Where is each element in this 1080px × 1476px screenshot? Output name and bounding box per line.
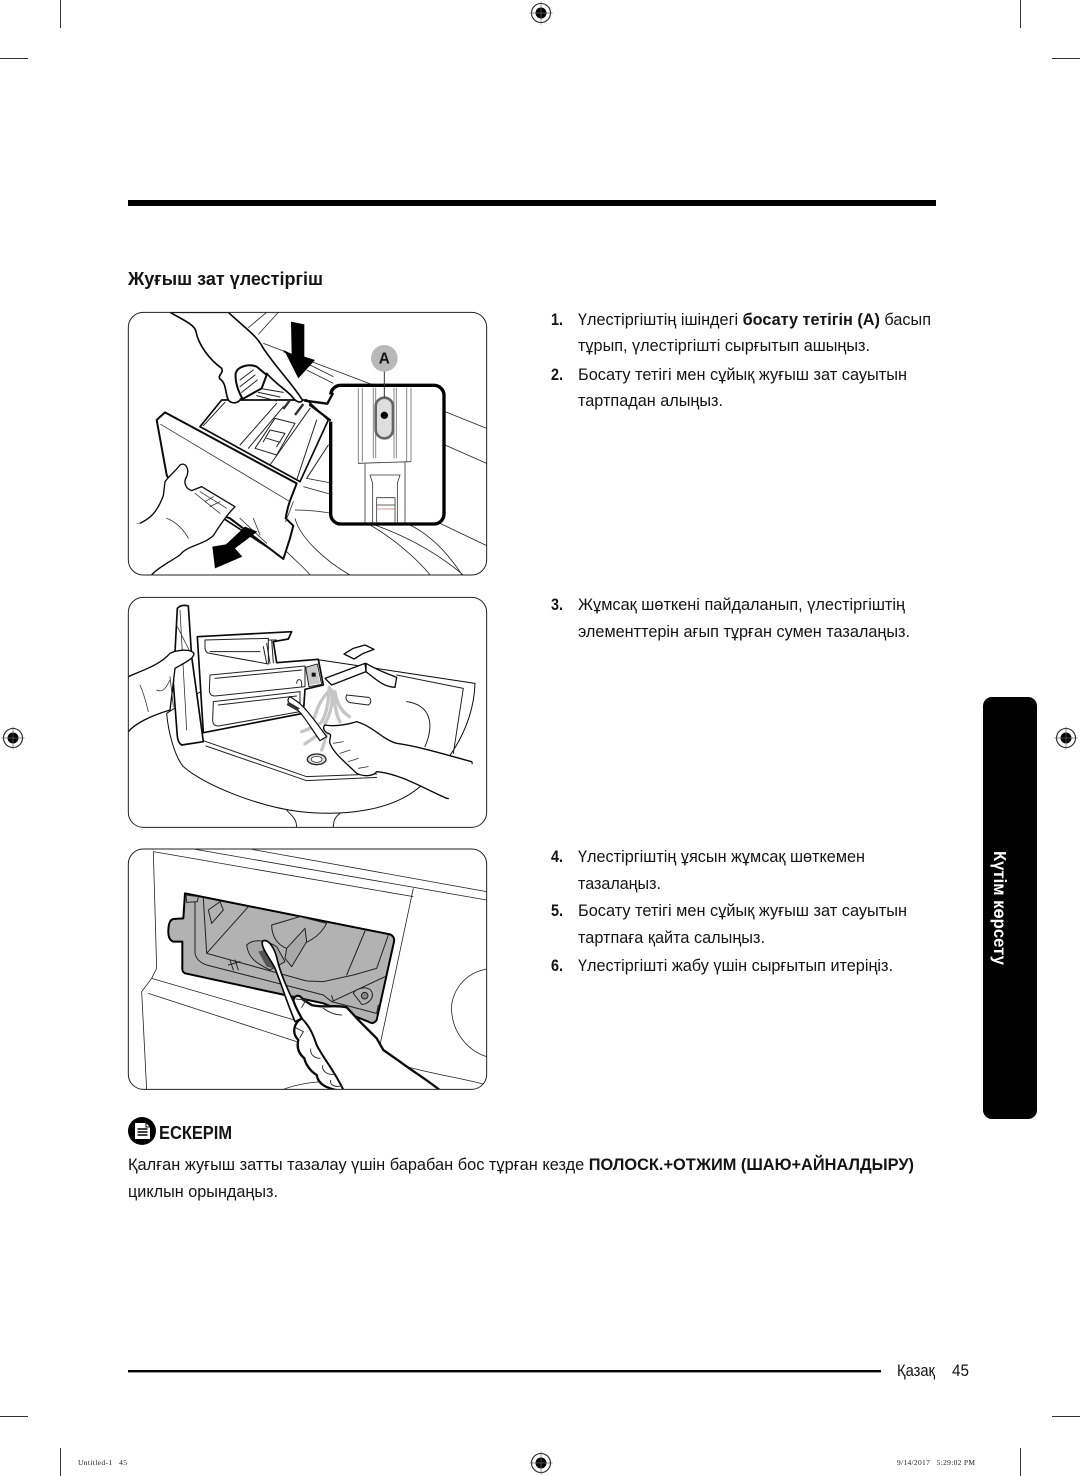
note heading: ЕСКЕРІМ: [159, 1123, 232, 1143]
steps 1 and 2: тұрып, үлестіргішті сырғытып ашыңыз.: [578, 336, 870, 355]
footer page label: 45: [952, 1362, 969, 1380]
washer body lines: [142, 849, 487, 1090]
registration mark: bottom: [530, 1452, 552, 1474]
right hand: [323, 721, 473, 800]
panel frame: [128, 849, 487, 1089]
arrow: press down: [284, 322, 315, 378]
steps 4 to 6: Босату тетігі мен сұйық жуғыш зат сауытын: [578, 901, 907, 920]
label A: [371, 345, 398, 372]
footer rule: [128, 1370, 881, 1372]
steps 1 and 2: тартпадан алыңыз.: [578, 391, 723, 410]
note text: циклын орындаңыз.: [128, 1182, 278, 1201]
steps 1 and 2: Үлестіргіштің ішіндегі босату тетігін (A) басып: [578, 310, 931, 329]
steps 4 to 6: 6.: [551, 956, 563, 975]
recess: [168, 893, 394, 1023]
steps 4 to 6: Үлестіргішті жабу үшін сырғытып итеріңіз.: [578, 956, 893, 975]
toothbrush: [258, 941, 302, 1022]
print slug right: 9/14/2017 5:29:02 PM: [897, 1458, 975, 1467]
panel frame: [128, 312, 487, 575]
steps 1 and 2: [551, 310, 931, 410]
panel frame: [128, 597, 487, 827]
step 3: элементтерін ағып тұрған сумен тазалаңыз.: [578, 622, 910, 641]
water: [302, 687, 349, 750]
side tab: Күтім көрсету: [990, 851, 1010, 965]
drawer front panel: [157, 412, 297, 559]
label A: A: [379, 351, 390, 368]
footer page label: [897, 1362, 969, 1380]
steps 4 to 6: Үлестіргіштің ұясын жұмсақ шөткемен: [578, 847, 865, 866]
side tab: [983, 697, 1037, 1119]
upper hand: [170, 312, 302, 403]
registration mark: top: [530, 2, 552, 24]
note text: [128, 1155, 914, 1201]
step 3: [551, 595, 910, 641]
panel: press release button and pull drawer: [127, 312, 487, 577]
panel: brush drawer recess: [128, 849, 487, 1092]
sink: [167, 660, 475, 828]
background lines: [248, 312, 487, 577]
step 3: Жұмсақ шөткені пайдаланып, үлестіргіштің: [578, 595, 906, 614]
panel: brush drawer under running water: [120, 597, 490, 828]
toothbrush: [287, 697, 327, 741]
lower hand: [130, 464, 235, 577]
top rule: [128, 200, 936, 206]
footer page label: Қазақ: [897, 1362, 936, 1380]
bottom slot lines: [223, 518, 267, 547]
registration mark: right: [1054, 726, 1078, 750]
upper hand cuff knob: [236, 365, 267, 399]
arrow: pull out: [212, 527, 257, 568]
steps 4 to 6: тартпаға қайта салыңыз.: [578, 928, 765, 947]
step 3: 3.: [551, 595, 563, 614]
steps 1 and 2: Босату тетігі мен сұйық жуғыш зат сауытын: [578, 365, 907, 384]
note text: Қалған жуғыш затты тазалау үшін барабан бос тұрған кезде ПОЛОСК.+ОТЖИМ (ШАЮ+АЙНАЛДЫРУ): [128, 1155, 914, 1174]
faucet: [325, 645, 397, 687]
steps 4 to 6: [551, 847, 907, 975]
drawer front: [173, 605, 203, 745]
steps 1 and 2: 2.: [551, 365, 563, 384]
print slug left: Untitled-1 45: [78, 1458, 127, 1467]
detergent drawer: [197, 632, 323, 733]
steps 4 to 6: 4.: [551, 847, 563, 866]
steps 4 to 6: 5.: [551, 901, 563, 920]
steps 4 to 6: тазалаңыз.: [578, 874, 661, 893]
hand: [293, 996, 442, 1092]
steps 1 and 2: 1.: [551, 310, 563, 329]
left hand: [128, 650, 195, 732]
drawer tray: [200, 388, 328, 482]
heading: Жуғыш зат үлестіргіш: [127, 269, 323, 289]
icon: note: [128, 1117, 156, 1145]
inset: button detail: [305, 371, 444, 524]
registration mark: left: [2, 726, 24, 750]
